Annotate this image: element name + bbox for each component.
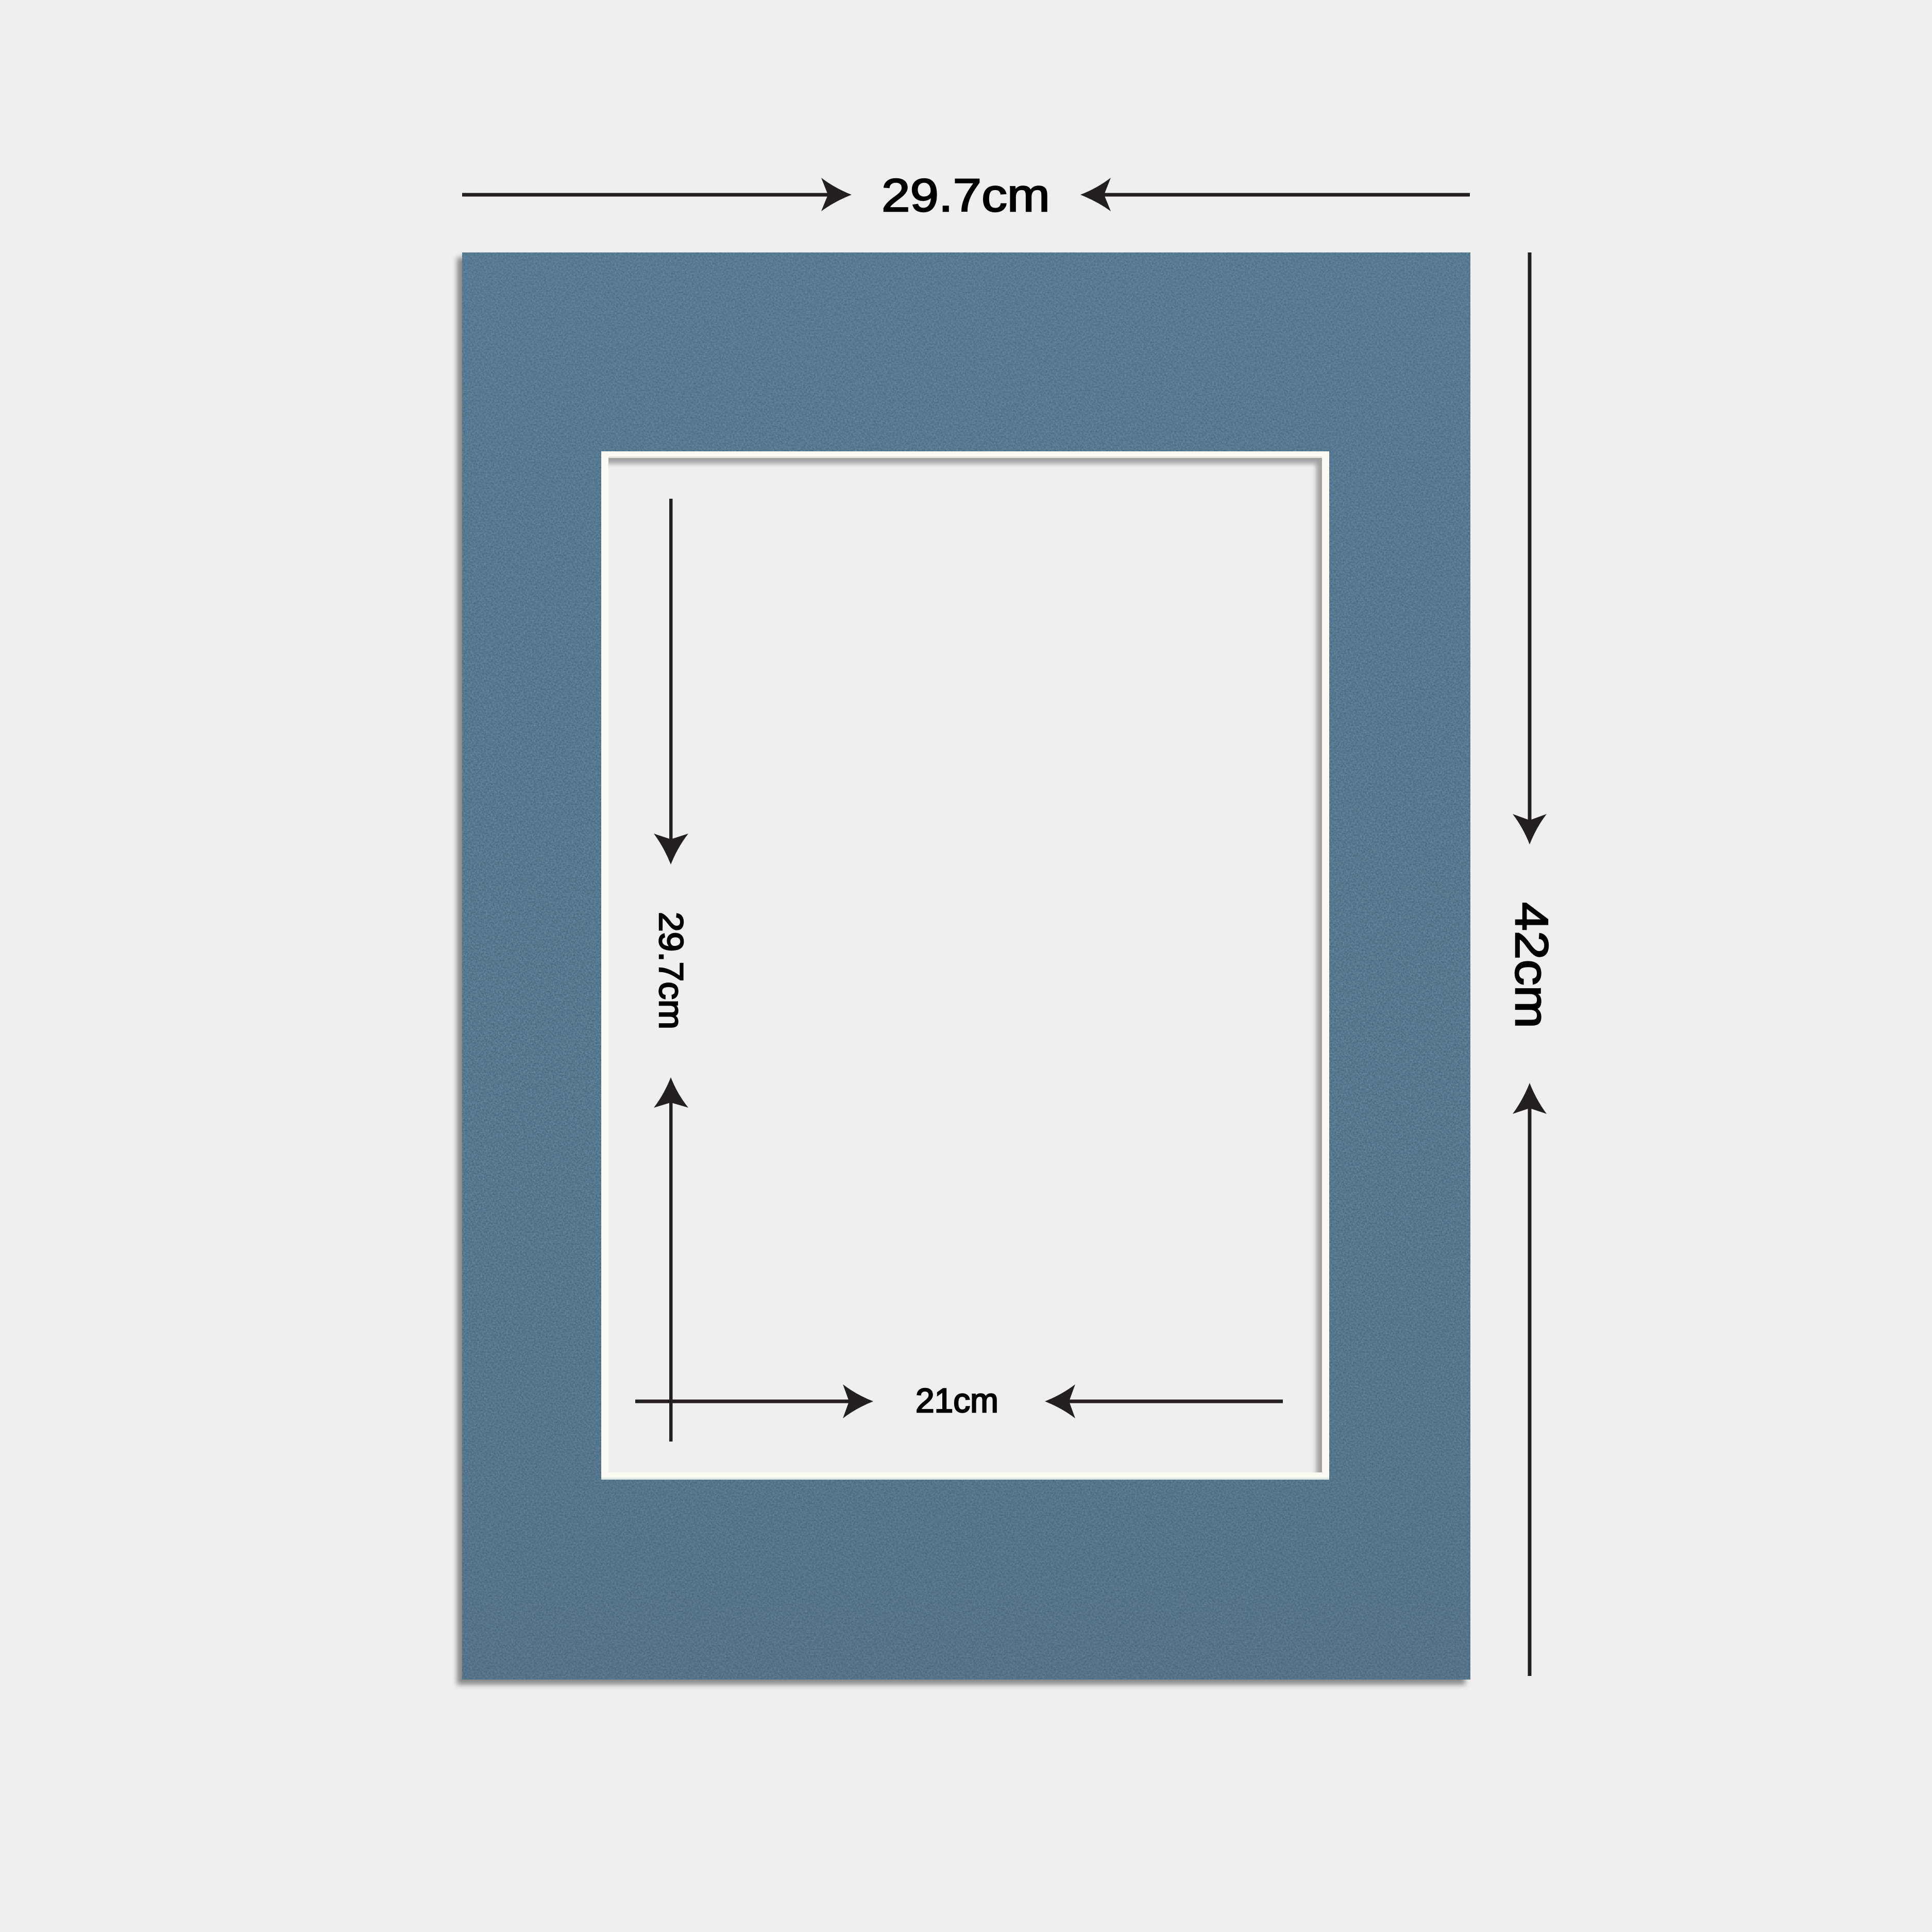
- arrow: inner height bottom: [654, 1077, 688, 1442]
- outer width dimension: 29.7cm: [462, 170, 1470, 222]
- arrow: outer width left: [462, 178, 852, 211]
- arrow: inner height top: [654, 499, 688, 865]
- arrow: outer height top: [1513, 252, 1547, 844]
- inner width dimension: 21cm: [635, 1381, 1283, 1419]
- arrow: outer width right: [1080, 178, 1470, 211]
- outer height dimension: 42cm: [1505, 252, 1557, 1676]
- mount board: [462, 252, 1470, 1680]
- mount drop shadow: [457, 258, 1465, 1685]
- arrow: inner width right: [1045, 1384, 1283, 1418]
- arrow: outer height bottom: [1513, 1083, 1547, 1676]
- window: cream bevel: [601, 451, 1329, 1480]
- infographic canvas: [453, 178, 1549, 1688]
- inner height dimension: 29.7cm: [652, 499, 690, 1442]
- label: outer height: 42cm: [1505, 902, 1557, 1028]
- window: opening with inner shadow: [608, 458, 1322, 1472]
- label: inner width: 21cm: [916, 1381, 998, 1419]
- label: outer width: 29.7cm: [882, 170, 1050, 222]
- label: inner height: 29.7cm: [652, 912, 690, 1029]
- arrow: inner width left: [635, 1384, 873, 1418]
- panel: blue picture mount: [457, 252, 1470, 1685]
